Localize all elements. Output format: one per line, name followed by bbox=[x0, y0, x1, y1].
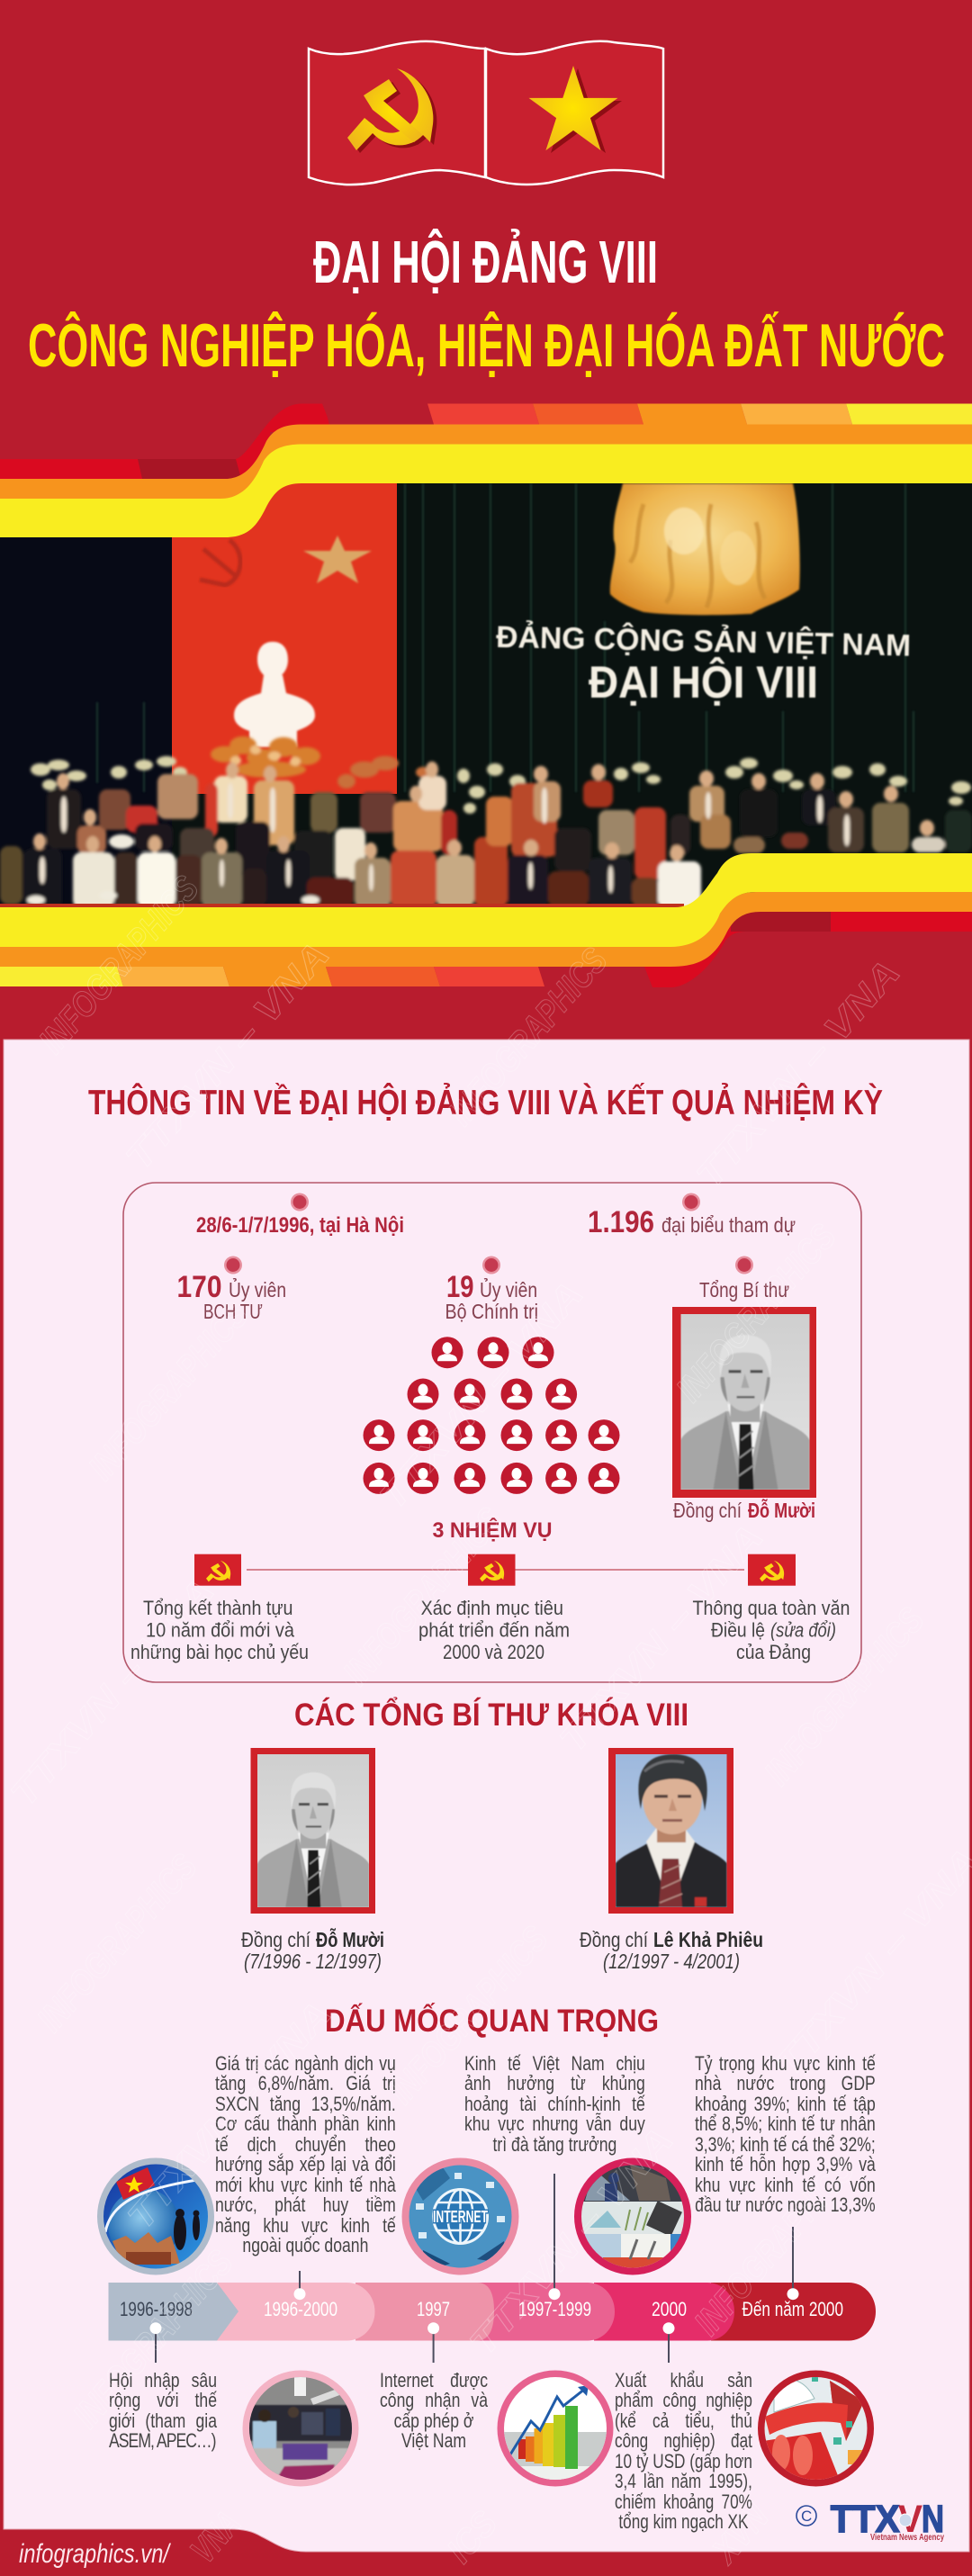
text: central committee members: BCH TƯ bbox=[203, 1300, 263, 1323]
watermark: diagonal agency marks: TTXVN – VNA bbox=[769, 1842, 972, 2085]
text: task 2: 2000 và 2020 bbox=[443, 1641, 544, 1663]
text: task 2: Xác định mục tiêu bbox=[421, 1597, 563, 1619]
heading: three tasks: 3 NHIỆM VỤ bbox=[432, 1518, 553, 1543]
text: internet licensed bbox=[380, 2369, 488, 2452]
top ribbon: curved orange and yellow bands with colour strip bbox=[0, 403, 972, 537]
text: GDP structure: khoảng 39%; kinh tế tập bbox=[695, 2093, 876, 2115]
watermark: diagonal agency marks: INFOGRAPHICS bbox=[758, 1600, 932, 1793]
photo: congress backdrop text: ĐẠI HỘI VIII bbox=[589, 656, 818, 707]
photo: flowers and delegates bbox=[0, 736, 972, 908]
watermark: diagonal agency marks: TTXVN – VNA bbox=[689, 953, 908, 1196]
text: delegates count: đại biểu tham dự bbox=[662, 1213, 796, 1237]
text: global integration bbox=[108, 2369, 218, 2452]
watermark: diagonal agency marks bbox=[4, 869, 972, 2571]
text: task 1: 10 năm đổi mới và bbox=[146, 1618, 294, 1642]
text: services and industry growth: Cơ cấu thành phần kinh bbox=[215, 2112, 396, 2135]
watermark: diagonal agency marks: TTXVN – VNA bbox=[119, 935, 338, 1178]
text: industrial exports: Xuất khẩu sản bbox=[615, 2369, 752, 2391]
image circle: red arrow and report bbox=[758, 2371, 874, 2486]
text: industrial exports: 10 tỷ USD (gấp hơn bbox=[615, 2450, 752, 2472]
watermark: diagonal agency marks: INFOGRAPHICS bbox=[688, 2150, 862, 2343]
heading: general secretaries: CÁC TỔNG BÍ THƯ KHÓA VIII bbox=[294, 1697, 688, 1733]
watermark: diagonal agency marks: INFOGRAPHICS bbox=[441, 941, 616, 1133]
text: financial crisis impact: trì đà tăng trưởng bbox=[493, 2133, 616, 2156]
text: financial crisis impact: Kinh tế Việt Nam chịu bbox=[464, 2052, 645, 2075]
photo: party congress hall bbox=[0, 483, 972, 908]
text: task 2 bbox=[418, 1597, 570, 1663]
text: Do Muoi caption: Đồng chí bbox=[241, 1928, 311, 1951]
text: services and industry growth: Giá trị các ngành dịch vụ bbox=[215, 2052, 396, 2075]
text: internet licensed: công nhận và bbox=[380, 2389, 488, 2411]
text: politburo members bbox=[445, 1270, 538, 1323]
icon: bullet dots bbox=[224, 1193, 753, 1274]
text: task 1: Tổng kết thành tựu bbox=[143, 1597, 293, 1619]
watermark: diagonal agency marks: INFOGRAPHICS bbox=[32, 869, 207, 1061]
text: GDP structure: kinh tế hỗn hợp 3,9% và bbox=[695, 2153, 876, 2175]
watermark: diagonal agency marks: TTXVN – VNA bbox=[553, 1518, 771, 1761]
image circle: growth bar chart bbox=[497, 2371, 614, 2486]
text: services and industry growth bbox=[215, 2052, 396, 2256]
text: politburo members: Bộ Chính trị bbox=[445, 1300, 538, 1323]
photo: gold relief of two heads bbox=[610, 483, 800, 615]
watermark: diagonal agency marks: INFOGRAPHICS bbox=[337, 1500, 511, 1693]
text: services and industry growth: nước, phát huy tiềm bbox=[215, 2193, 396, 2216]
image circle: global integration bbox=[97, 2158, 216, 2275]
text: GDP structure: khu vực kinh tế có vốn bbox=[695, 2174, 876, 2196]
panel: congress facts card bbox=[123, 1183, 861, 1682]
icon: waving flags with hammer and sickle and star bbox=[309, 41, 663, 185]
text: portrait caption: Đồng chí bbox=[673, 1499, 742, 1522]
timeline connectors and dots bbox=[149, 2174, 799, 2363]
watermark: diagonal agency marks: INFOGRAPHICS bbox=[67, 2243, 241, 2436]
logo: TTXVN Vietnam News Agency: TTX bbox=[831, 2498, 900, 2541]
photo: red banner bbox=[172, 483, 397, 794]
text: industrial exports: phẩm công nghiệp bbox=[615, 2389, 752, 2411]
text: financial crisis impact bbox=[464, 2052, 645, 2156]
text: Le Kha Phieu caption: Đồng chí bbox=[580, 1928, 648, 1951]
text: Le Kha Phieu caption bbox=[580, 1928, 763, 1973]
icon: copyright mark: C bbox=[801, 2508, 812, 2525]
watermark: diagonal agency marks: TTXVN – VNA bbox=[463, 2121, 681, 2364]
image circle: industry collage bbox=[574, 2158, 698, 2275]
watermark: diagonal agency marks: INFOGRAPHICS bbox=[82, 1295, 256, 1488]
icon: connector line and three party flags bbox=[194, 1554, 796, 1586]
text: task 1 bbox=[130, 1597, 309, 1663]
timeline labels bbox=[120, 2298, 843, 2320]
text: industrial exports: công nghiệp) đạt bbox=[615, 2429, 752, 2452]
text: delegates count: 1.196 bbox=[588, 1205, 654, 1239]
watermark: diagonal agency marks: TTXVN – VNA bbox=[373, 1274, 591, 1518]
watermark: diagonal agency marks: INFOGRAPHICS bbox=[31, 1847, 205, 2040]
timeline labels: Đến năm 2000 bbox=[742, 2298, 843, 2320]
bottom ribbon: curved yellow and orange bands with colour strip bbox=[0, 853, 972, 987]
text: delegates count bbox=[588, 1205, 796, 1239]
text: GDP structure: thể 8,5%; kinh tế tư nhân bbox=[695, 2112, 876, 2135]
timeline labels: 1997 bbox=[417, 2298, 450, 2320]
text: GDP structure: nhà nước trong GDP bbox=[695, 2072, 876, 2094]
text: portrait caption bbox=[673, 1498, 815, 1522]
text: internet licensed: Internet được bbox=[380, 2369, 488, 2391]
icon: copyright mark bbox=[796, 2506, 816, 2526]
portrait: Le Kha Phieu bbox=[608, 1748, 734, 1914]
icon: grid of 19 politburo members bbox=[364, 1337, 619, 1494]
text: task 3: Thông qua toàn văn bbox=[693, 1597, 850, 1619]
text: central committee members: 170 bbox=[176, 1270, 221, 1304]
watermark: diagonal agency marks: TTXVN – VNA bbox=[4, 1572, 222, 1815]
text: services and industry growth: năng khu vực kinh tế bbox=[215, 2214, 396, 2237]
text: central committee members bbox=[176, 1270, 286, 1323]
text: general secretary label: Tổng Bí thư bbox=[699, 1278, 789, 1302]
text: global integration: ASEM, APEC…) bbox=[108, 2429, 215, 2452]
photo: white bust on the banner bbox=[234, 642, 315, 747]
heading: important milestones: DẤU MỐC QUAN TRỌNG bbox=[325, 2003, 659, 2039]
text: services and industry growth: SXCN tăng 13,5%/năm. bbox=[215, 2093, 396, 2115]
logo: TTXVN Vietnam News Agency: Vietnam News Agency bbox=[870, 2532, 944, 2543]
text: financial crisis impact: khu vực nhưng vẫn duy bbox=[464, 2112, 645, 2135]
text: global integration: giới (tham gia bbox=[108, 2409, 216, 2432]
text: politburo members: Ủy viên bbox=[480, 1276, 537, 1302]
text: politburo members: 19 bbox=[446, 1270, 473, 1304]
image circle: internet bbox=[401, 2158, 518, 2275]
timeline labels: 1997-1999 bbox=[518, 2298, 591, 2320]
text: central committee members: Ủy viên bbox=[229, 1276, 286, 1302]
text: services and industry growth: hướng sắp xếp lại và đổi bbox=[215, 2153, 396, 2175]
text: industrial exports: 3,4 lần năm 1995), bbox=[615, 2470, 752, 2492]
text: task 2: phát triển đến năm bbox=[418, 1618, 570, 1642]
watermark: diagonal agency marks: VNA bbox=[184, 2504, 248, 2571]
logo: TTXVN Vietnam News Agency: V bbox=[898, 2498, 922, 2541]
text: GDP structure: 3,3%; kinh tế cá thể 32%; bbox=[695, 2133, 876, 2156]
text: financial crisis impact: hoảng tài chính-kinh tế bbox=[464, 2093, 645, 2115]
text: internet licensed: Việt Nam bbox=[401, 2429, 466, 2452]
portrait: general secretary Do Muoi bbox=[672, 1307, 816, 1498]
text: industrial exports: chiếm khoảng 70% bbox=[615, 2490, 752, 2513]
text: GDP structure: đầu tư nước ngoài 13,3% bbox=[695, 2193, 876, 2216]
watermark: diagonal agency marks: INFOGRAPHICS bbox=[382, 1919, 556, 2112]
image circle: garment factory bbox=[243, 2371, 360, 2486]
text: services and industry growth: mới khu vực kinh tế nhà bbox=[215, 2174, 396, 2196]
text: task 3: Điều lệ bbox=[711, 1618, 765, 1642]
text: task 1: những bài học chủ yếu bbox=[130, 1641, 309, 1663]
logo: TTXVN Vietnam News Agency bbox=[831, 2498, 944, 2543]
text: services and industry growth: tế dịch chuyển theo bbox=[215, 2133, 396, 2156]
text: global integration: rộng với thế bbox=[108, 2389, 216, 2411]
text: task 3: (sửa đổi) bbox=[770, 1618, 836, 1642]
watermark: diagonal agency marks: TTXVN – VNA bbox=[121, 1995, 339, 2238]
text: task 3 bbox=[693, 1597, 850, 1663]
timeline labels: 2000 bbox=[652, 2298, 687, 2320]
text: industrial exports bbox=[615, 2369, 752, 2533]
watermark: diagonal agency marks: XVN bbox=[704, 2496, 777, 2571]
text: portrait caption: Đỗ Mười bbox=[748, 1498, 815, 1522]
panel: pink content area bbox=[4, 1040, 969, 2552]
image circle: internet: INTERNET bbox=[433, 2208, 488, 2226]
watermark: diagonal agency marks: ICS bbox=[440, 2504, 505, 2571]
text: date and place: 28/6-1/7/1996, tại Hà Nội bbox=[196, 1213, 404, 1238]
footer: website: infographics.vn/ bbox=[19, 2539, 171, 2569]
text: global integration: Hội nhập sâu bbox=[108, 2369, 216, 2391]
text: Le Kha Phieu caption: Lê Khả Phiêu bbox=[653, 1928, 763, 1951]
title: congress name: ĐẠI HỘI ĐẢNG VIII bbox=[313, 229, 658, 296]
text: Do Muoi caption bbox=[241, 1927, 384, 1973]
logo: TTXVN Vietnam News Agency: N bbox=[922, 2498, 944, 2541]
portrait: Do Muoi bbox=[250, 1748, 375, 1914]
timeline labels: 1996-2000 bbox=[264, 2298, 338, 2320]
photo: congress backdrop text bbox=[496, 619, 912, 707]
text: GDP structure bbox=[695, 2052, 876, 2216]
photo: congress backdrop text: ĐẢNG CỘNG SẢN VIỆT NAM bbox=[496, 619, 912, 663]
text: GDP structure: Tỷ trọng khu vực kinh tế bbox=[695, 2052, 876, 2075]
text: industrial exports: (kể cả tiểu, thủ bbox=[615, 2409, 752, 2432]
text: task 3: của Đảng bbox=[736, 1641, 811, 1663]
text: internet licensed: cấp phép ở bbox=[394, 2409, 473, 2432]
timeline bar bbox=[108, 2174, 876, 2363]
text: Do Muoi caption: (7/1996 - 12/1997) bbox=[244, 1950, 382, 1973]
timeline labels: 1996-1998 bbox=[120, 2298, 193, 2320]
text: services and industry growth: tăng 6,8%/năm. Giá trị bbox=[215, 2072, 396, 2094]
text: industrial exports: tổng kim ngạch XK bbox=[618, 2510, 748, 2533]
text: financial crisis impact: ảnh hưởng từ khủng bbox=[464, 2072, 645, 2094]
text: Le Kha Phieu caption: (12/1997 - 4/2001) bbox=[603, 1950, 740, 1973]
watermark: diagonal agency marks: INFOGRAPHICS bbox=[670, 1217, 844, 1410]
text: Do Muoi caption: Đỗ Mười bbox=[316, 1927, 384, 1951]
text: services and industry growth: ngoài quốc doanh bbox=[243, 2234, 369, 2256]
